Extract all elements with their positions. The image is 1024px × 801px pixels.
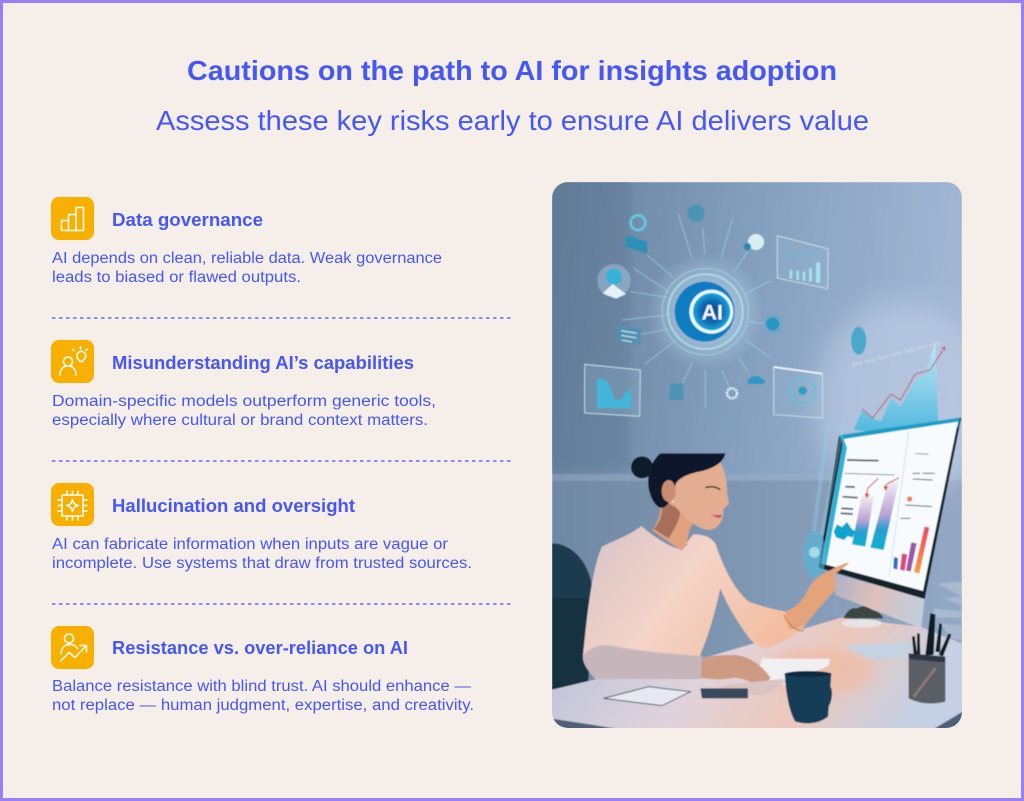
monitor and desk scene xyxy=(551,418,965,732)
hair xyxy=(648,453,725,508)
subtitle: Assess these key risks early to ensure AI delivers value xyxy=(156,105,869,136)
keyboard xyxy=(755,658,830,685)
panel: resistance vs over-reliance xyxy=(51,626,474,714)
monitor bezel xyxy=(819,418,961,599)
chair xyxy=(552,542,592,600)
hand on keyboard xyxy=(701,655,770,684)
monitor screen xyxy=(821,422,958,591)
pen cup xyxy=(909,613,951,704)
pointing hand xyxy=(785,562,849,630)
desk xyxy=(551,618,965,730)
heading: hallucination: Hallucination and oversight xyxy=(112,496,355,516)
illustration: woman at monitor with AI hologram xyxy=(552,182,962,728)
hologram: chart panel upper right xyxy=(777,236,828,289)
hologram: gauge panel lower right xyxy=(774,367,823,418)
hologram ring beside monitor xyxy=(803,422,844,578)
ear xyxy=(662,480,676,502)
text: resistance description xyxy=(52,678,474,714)
icon: person with rising arrow xyxy=(51,626,94,669)
hologram: rising chart xyxy=(854,342,946,438)
text: hallucination description: incomplete. Use systems that draw from trusted sources. xyxy=(52,555,472,572)
title: Cautions on the path to AI for insights adoption xyxy=(187,55,837,86)
neck xyxy=(652,498,694,550)
torso and arms xyxy=(583,526,806,679)
text: hallucination description: AI can fabricate information when inputs are vague or xyxy=(52,536,448,553)
text: misunderstanding description: Domain-specific models outperform generic tools, xyxy=(52,393,436,410)
plant xyxy=(842,606,884,628)
panel: data governance xyxy=(51,197,442,286)
text: hallucination description xyxy=(52,536,472,572)
text: resistance description: Balance resistance with blind trust. AI should enhance — xyxy=(52,678,472,695)
monitor stand xyxy=(842,642,912,660)
text: data governance description: AI depends on clean, reliable data. Weak governance xyxy=(52,250,442,267)
text: resistance description: not replace — human judgment, expertise, and creativity. xyxy=(52,697,474,714)
woman xyxy=(583,453,849,685)
text: misunderstanding description xyxy=(52,393,436,429)
mug xyxy=(785,671,831,723)
monitor chin xyxy=(834,573,925,628)
text: data governance description: leads to biased or flawed outputs. xyxy=(52,269,301,286)
hologram: AI hub xyxy=(585,205,946,438)
panel: hallucination and oversight xyxy=(51,483,472,572)
keyboard base xyxy=(718,678,786,696)
hologram: chart panel lower left xyxy=(585,364,640,416)
notebook xyxy=(604,687,690,706)
phones xyxy=(700,688,748,698)
books xyxy=(934,582,965,639)
text: data governance description xyxy=(52,250,442,286)
heading: misunderstanding capabilities: Misunderstanding AI’s capabilities xyxy=(112,353,414,373)
icon: chip xyxy=(51,483,94,526)
heading: data governance: Data governance xyxy=(112,210,263,230)
icon: bar chart xyxy=(51,197,94,240)
icon: person with lightbulb xyxy=(51,340,94,383)
heading: resistance: Resistance vs. over-reliance on AI xyxy=(112,638,408,658)
face xyxy=(670,459,729,530)
text: misunderstanding description: especially where cultural or brand context matters. xyxy=(52,412,428,429)
label: AI core: AI xyxy=(702,301,723,325)
hologram: floating caption xyxy=(851,327,943,365)
panel: misunderstanding capabilities xyxy=(51,340,436,429)
